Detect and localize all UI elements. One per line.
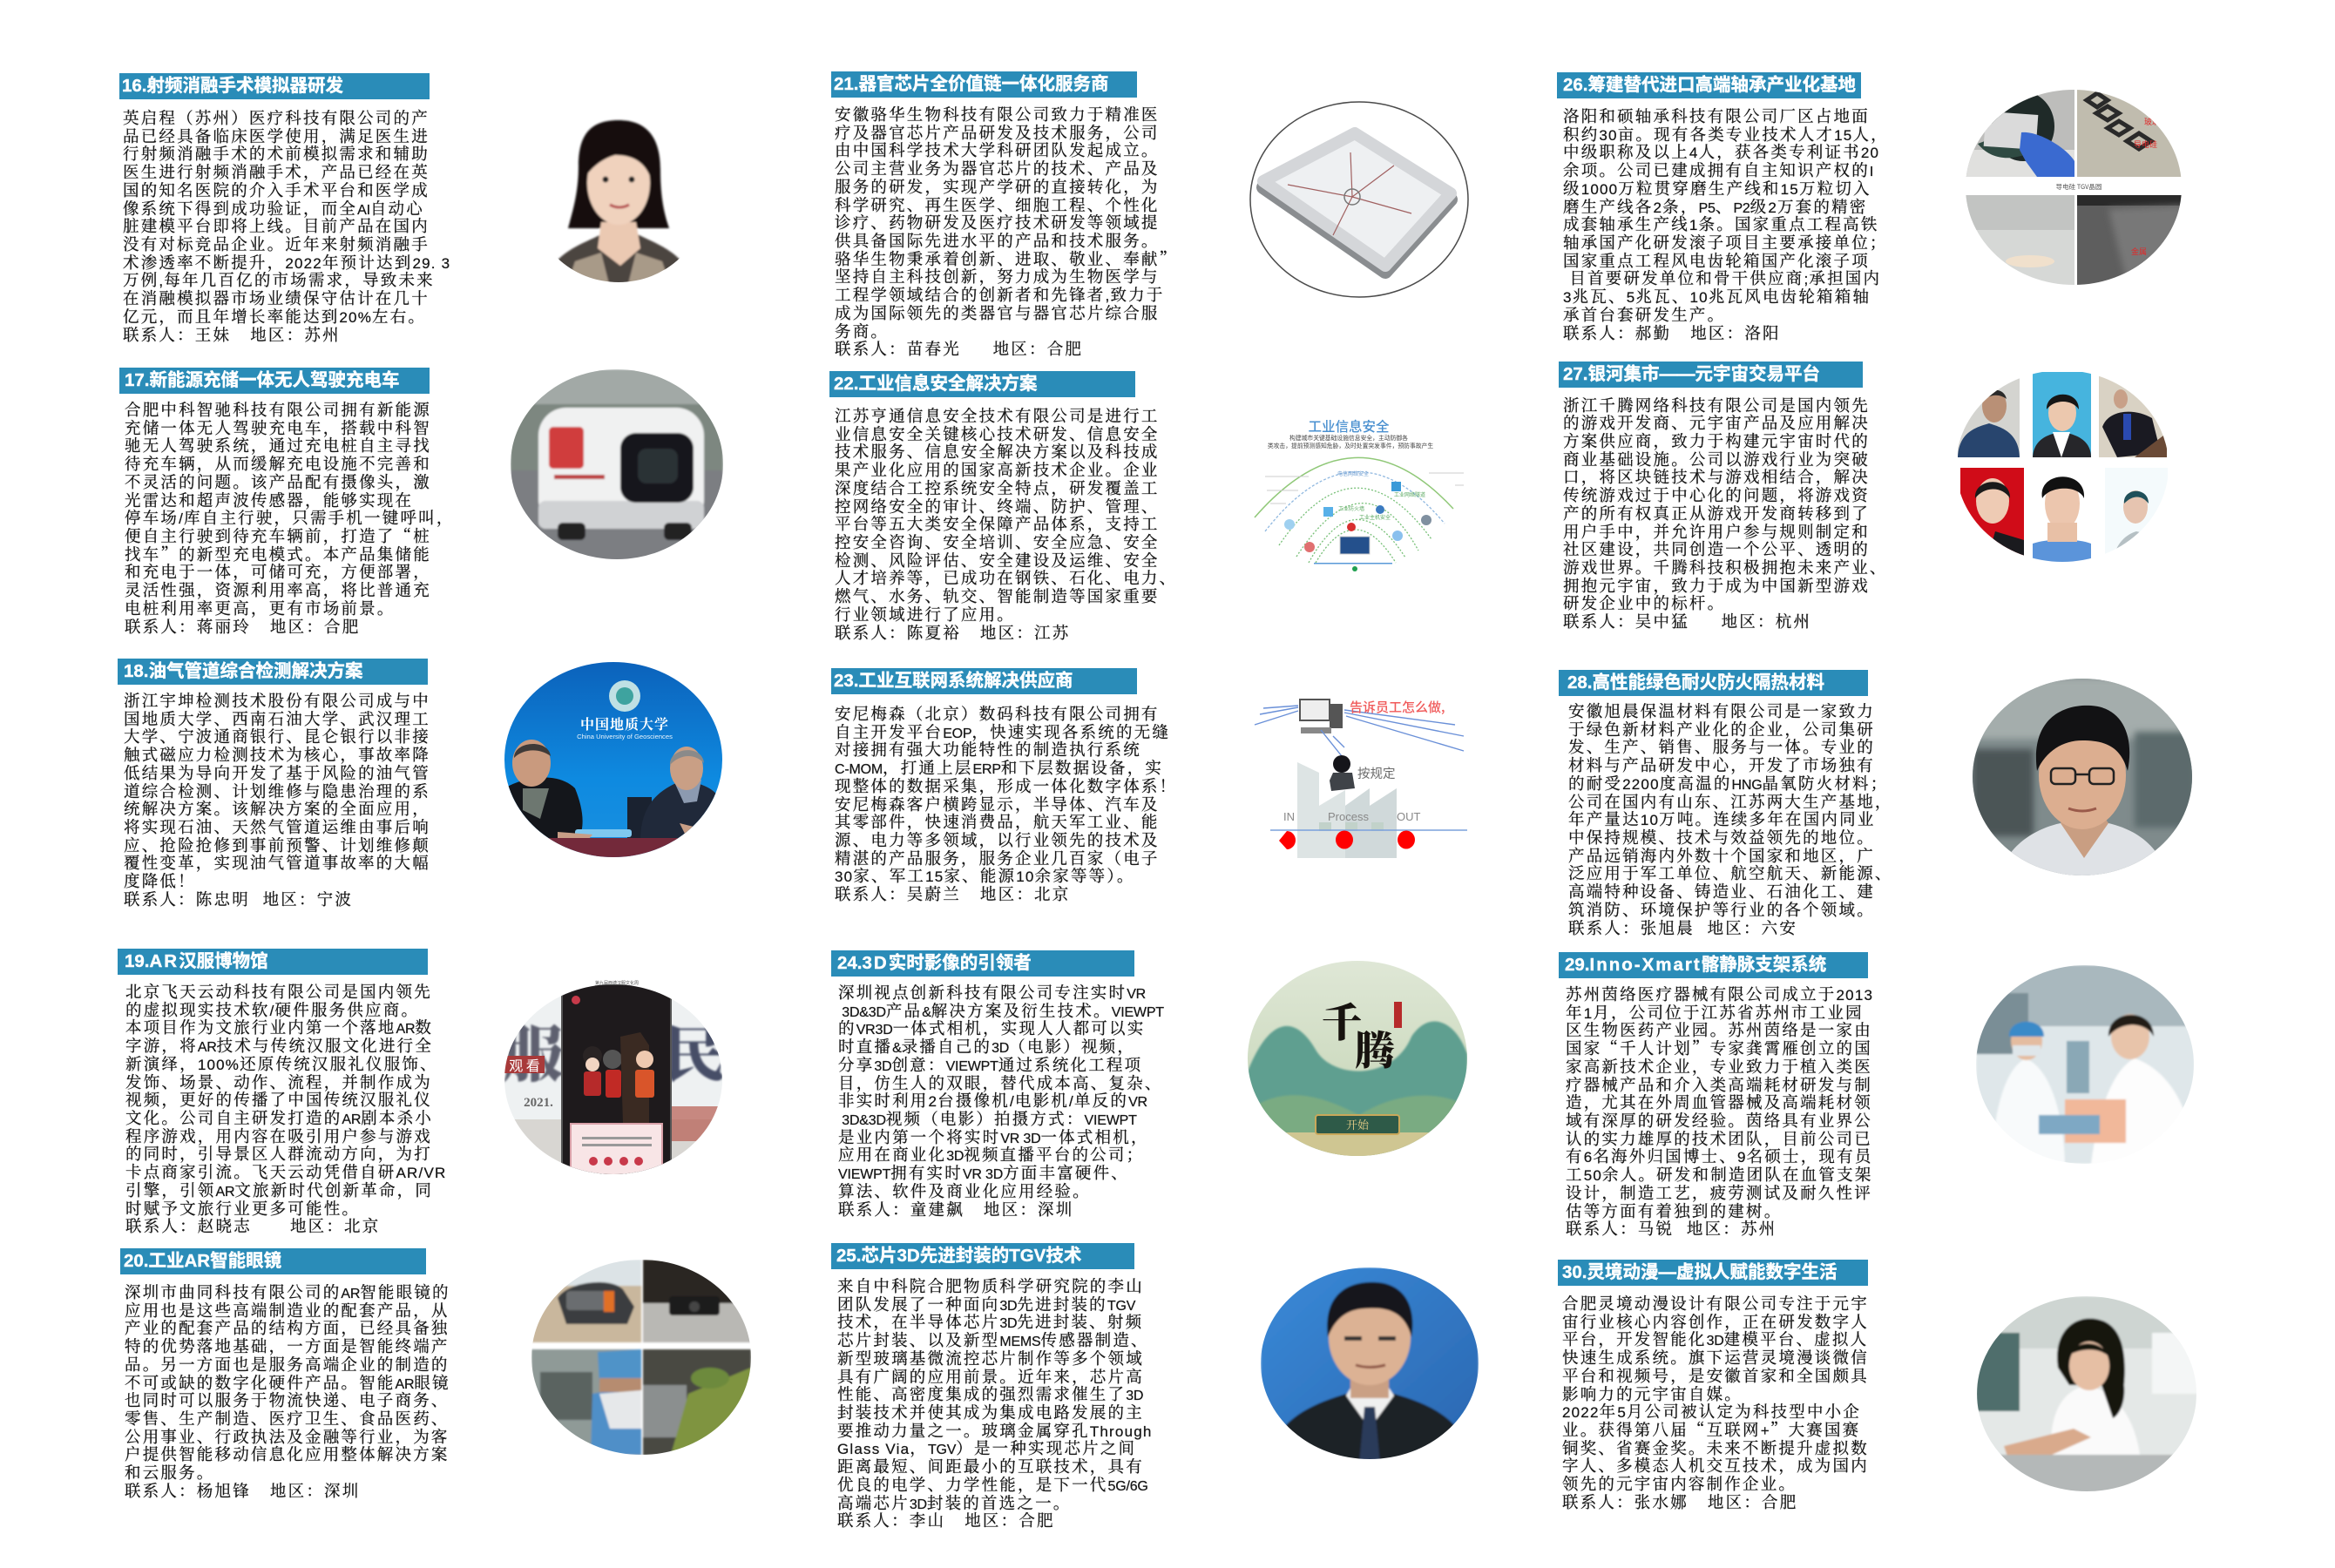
panel: 23 industrial internet system [831, 668, 1467, 903]
text block: 20 description: 深圳市曲同科技有限公司的AR智能眼镜的 应用也是这些高端制造业的配套产品，从 产业的配套产品的结构方面，已经具备独 特的优势落地基础，一方面是智能终端产 品。另一方面也是服务高端企业的制造的 不可或缺的数字化硬件产品。智能AR眼镜 也同时可以服务于物流快递、电子商务、 零售、生产制造、医疗卫生、食品医药、 公用事业、行政执法及金融等行业，为客 户提供智能移动信息化应用整体解决方案 和云服务。 联系人：杨旭锋 地区：深圳 [125, 1283, 450, 1500]
photo: Qianteng game title screen: 开始 [1346, 1116, 1370, 1132]
diagram: industrial security arcs: 构建城市关键基础设施信息安全，主动防御各 [1289, 433, 1408, 442]
photo: TGV wafer four-panel images [1966, 90, 2182, 285]
heading: 18: 18.油气管道综合检测解决方案 [124, 661, 362, 681]
photo: woman portrait [558, 118, 680, 282]
heading: 20 [120, 1248, 426, 1274]
photo: two men at China University of Geosciences: China University of Geosciences [577, 733, 673, 740]
panel: 16 radiofrequency ablation simulator [119, 73, 680, 344]
photo: Qianteng game title screen [1248, 961, 1467, 1156]
photo: charging robot vehicle [511, 369, 723, 559]
photo: six team member portraits [1958, 372, 2168, 562]
panel: 28 fireproof insulation material [1559, 670, 2192, 937]
diagram: industrial security arcs [1255, 418, 1464, 571]
heading: 24 [831, 950, 1134, 977]
text block: 26 description: 洛阳和硕轴承科技有限公司厂区占地面 积约30亩。现有各类专业技术人才15人， 中级职称及以上4人，获各类专利证书20 余项。公司已建成拥有自主知识产权的I 级1000万粒贯穿磨生产线和15万粒切入 磨生产线各2条，P5、P2级2万套的精密 成套轴承生产线1条。国家重点工程高铁 轴承国产化研发滚子项目主要承接单位； 国家重点工程风电齿轮箱国产化滚子项 目首要研发单位和骨干供应商;承担国内 3兆瓦、5兆瓦、10兆瓦风电齿轮箱箱轴 承首台套研发生产。 联系人：郝勤 地区：洛阳 [1563, 107, 1889, 342]
text block: 30 description: 合肥灵境动漫设计有限公司专注于元宇 宙行业核心内容创作，正在研发数字人 平台，开发智能化3D建模平台、虚拟人 快速生成系统。旗下运营灵境漫谈微信 平台和视频号，是安徽首家和全国颇具 影响力的元宇宙自媒。 2022年5月公司被认定为科技型中小企 业。获得第八届“互联网+”大赛国赛 铜奖、省赛金奖。未来不断提升虚拟数 字人、多模态人机交互技术，成为国内 领先的元宇宙内容制作企业。 联系人：张水娜 地区：合肥 [1562, 1294, 1869, 1511]
photo: woman working at desk [1976, 1296, 2197, 1492]
panel: 21 organ-on-chip services [831, 71, 1469, 358]
heading: 30 [1558, 1260, 1868, 1286]
heading: 17: 17.新能源充储一体无人驾驶充电车 [125, 370, 399, 390]
heading: 27 [1559, 362, 1863, 388]
heading: 24: 24.3D实时影像的引领者 [837, 953, 1032, 973]
text block: 25 description: 来自中科院合肥物质科学研究院的李山 团队发展了一种面向3D先进封装的TGV 技术，在半导体芯片3D先进封装、射频 芯片封装、以及新型MEMS传感器制造、 新型玻璃基微流控芯片制作等多个领域 具有广阔的应用前景。近年来，芯片高 性能、高密度集成的强烈需求催生了3D 封装技术并使其成为集成电路发展的主 要推动力量之一。玻璃金属穿孔Through Glass Via，TGV）是一种实现芯片之间 距离最短、间距最小的互联技术，具有 优良的电学、力学性能，是下一代5G/6G 高端芯片3D封装的首选之一。 联系人：李山 地区：合肥 [837, 1277, 1153, 1530]
text block: 27 description: 浙江千腾网络科技有限公司是国内领先 的游戏开发商、元宇宙产品及应用解决 方案供应商，致力于构建元宇宙时代的 商业基础设施。公司以游戏行业为突破 口，将区块链技术与游戏相结合，解决 传统游戏过于中心化的问题，将游戏资 产的所有权真正从游戏开发商转移到了 用户手中，并允许用户参与规则制定和 社区建设，共同创造一个公平、透明的 游戏世界。千腾科技积极拥抱未来产业、 拥抱元宇宙，致力于成为中国新型游戏 研发企业中的标杆。 联系人：吴中猛 地区：杭州 [1563, 395, 1888, 631]
text block: 21 description: 安徽骆华生物科技有限公司致力于精准医 疗及器官芯片产品研发及技术服务，公司 由中国科学技术大学科研团队发起成立。 公司主营业务为器官芯片的技术、产品及 服务的研发，实现产学研的直接转化，为 科学研究、再生医学、细胞工程、个性化 诊疗、药物研发及医疗技术研发等领域提 供具备国际先进水平的产品和技术服务。 骆华生物秉承着创新、进取、敬业、奉献” 坚持自主科技创新，努力成为生物医学与 工程学领域结合的创新者和先锋者,致力于 成为国际领先的类器官与器官芯片综合服 务商。 联系人：苗春光 地区：合肥 [835, 105, 1177, 358]
photo: four-panel AR glasses images [531, 1260, 751, 1455]
panel: 27 galaxy market metaverse [1559, 362, 2168, 631]
panel: 17 unmanned charging vehicle [119, 368, 723, 636]
heading: 20: 20.工业AR智能眼镜 [124, 1251, 281, 1271]
heading: 28: 28.高性能绿色耐火防火隔热材料 [1567, 672, 1824, 693]
photo: two men at China University of Geosciences [504, 662, 722, 857]
text block: 17 description: 合肥中科智驰科技有限公司拥有新能源 充储一体无人驾驶充电车，搭载中科智 驰无人驾驶系统，通过充电桩自主寻找 待充车辆，从而缓解充电设施不完善和 不灵活的问题。该产品配有摄像头，激 光雷达和超声波传感器，能够实现在 停车场/库自主行驶，只需手机一键呼叫， 便自主行驶到待充车辆前，打造了“桩 找车”的新型充电模式。本产品集储能 和充电于一体，可储可充，方便部署， 灵活性强，资源利用率高，将比普通充 电桩利用率更高，更有市场前景。 联系人：蒋丽玲 地区：合肥 [125, 401, 455, 636]
heading: 25: 25.芯片3D先进封装的TGV技术 [836, 1246, 1081, 1266]
photo: AR Hanfu phone screen: 2021. [524, 1096, 553, 1110]
photo: man in suit portrait [1261, 1267, 1479, 1459]
photo: AR Hanfu phone screen [504, 980, 722, 1174]
panel: 25 TGV advanced chip packaging [831, 1243, 1479, 1530]
diagram: factory process flow: 告诉员工怎么做, [1350, 698, 1445, 716]
text block: 19 description: 北京飞天云动科技有限公司是国内领先 的虚拟现实技术软/硬件服务供应商。 本项目作为文旅行业内第一个落地AR数 字游，将AR技术与传统汉服文化进行全 新演绎，100%还原传统汉服礼仪服饰、 发饰、场景、动作、流程，并制作成为 视频，更好的传播了中国传统汉服礼仪 文化。公司自主研发打造的AR剧本杀小 程序游戏，用内容在吸引用户参与游戏 的同时，引导景区人群流动方向，为打 卡点商家引流。飞天云动凭借自研AR/VR 引擎，引领AR文旅新时代创新革命，同 时赋予文旅行业更多可能性。 联系人：赵晓志 地区：北京 [125, 983, 446, 1235]
heading: 28 [1559, 670, 1868, 696]
heading: 29: 29.Inno-Xmart髂静脉支架系统 [1565, 955, 1826, 975]
heading: 16 [119, 73, 430, 99]
text block: 28 description: 安徽旭晨保温材料有限公司是一家致力 于绿色新材料产业化的企业，公司集研 发、生产、销售、服务与一体。专业的 材料与产品研发中心，开发了市场独有 的耐受2200度高温的HNG晶氧防火材料； 公司在国内有山东、江苏两大生产基地， 年产量达10万吨。连续多年在国内同业 中保持规模、技术与效益领先的地位。 产品远销海内外数十个国家和地区，广 泛应用于军工单位、航空航天、新能源、 高端特种设备、铸造业、石油化工、建 筑消防、环境保护等行业的各个领域。 联系人：张旭晨 地区：六安 [1568, 702, 1893, 937]
diagram: industrial security arcs: 电信网络安全 [1337, 470, 1369, 477]
diagram: factory process flow: OUT [1397, 810, 1420, 823]
caption between photos: 导电硅 TGV晶圆 [2056, 182, 2102, 192]
panel: 19 AR Hanfu museum [118, 949, 722, 1235]
heading: 21 [831, 71, 1137, 98]
panel: 26 high-end bearing base [1557, 72, 2182, 342]
diagram: industrial security arcs: 类攻击，提前预测感知危胁，及时处置突发事件，预防事故产生 [1268, 441, 1433, 449]
photo: lab workers in white coats [1976, 965, 2195, 1164]
text block: 22 description: 江苏亨通信息安全技术有限公司是进行工 业信息安全关键核心技术研发、信息安全 技术服务、信息安全解决方案以及科技成 果产业化应用的国家高新技术企业。企业 深度结合工控系统安全特点，研发覆盖工 控网络安全的审计、终端、防护、管理、 平台等五大类安全保障产品体系，支持工 控安全咨询、安全培训、安全应急、安全 检测、风险评估、安全建设及运维、安全 人才培养等，已成功在钢铁、石化、电力、 燃气、水务、轨交、智能制造等国家重要 行业领域进行了应用。 联系人：陈夏裕 地区：江苏 [835, 407, 1177, 642]
diagram: industrial security arcs: 工业防火墙 [1338, 504, 1364, 512]
photo: AR Hanfu phone screen: 观 看 [509, 1054, 540, 1075]
photo: Qianteng game title screen: 千 [1322, 991, 1362, 1049]
diagram: industrial security arcs: 工业网络隧道 [1394, 490, 1425, 498]
diagram: factory process flow [1255, 698, 1467, 858]
heading: 26: 26.筹建替代进口高端轴承产业化基地 [1563, 75, 1856, 95]
heading: 30: 30.灵境动漫—虚拟人赋能数字生活 [1562, 1262, 1837, 1282]
heading: 18 [118, 659, 428, 685]
photo: TGV wafer four-panel images: 金属 [2131, 246, 2147, 257]
panel: 24 real-time 3D imaging [831, 950, 1467, 1219]
heading: 21: 21.器官芯片全价值链一体化服务商 [834, 74, 1108, 94]
diagram: factory process flow: IN [1283, 810, 1295, 823]
diagram: factory process flow: Process [1328, 810, 1369, 823]
panel: 20 industrial AR smart glasses [120, 1248, 751, 1500]
heading: 23 [831, 668, 1137, 694]
panel: 22 industrial information security [829, 371, 1464, 642]
panel: 29 Inno-Xmart iliac vein stent [1559, 952, 2194, 1238]
text block: 29 description: 苏州茵络医疗器械有限公司成立于2013 年1月，公司位于江苏省苏州市工业园 区生物医药产业园。苏州茵络是一家由 国家“千人计划”专家龚霄雁创立的国 家高新技术企业，专业致力于植入类医 疗器械产品和介入类高端耗材研发与制 造，尤其在外周血管器械及高端耗材领 域有深厚的研发经验。茵络具有业界公 认的实力雄厚的技术团队，目前公司已 有6名海外归国博士、9名硕士，现有员 工50余人。研发和制造团队在血管支架 设计，制造工艺，疲劳测试及耐久性评 估等方面有着独到的建树。 联系人：马锐 地区：苏州 [1566, 985, 1873, 1238]
caption over phone: 第九届西塘汉服文化周 [595, 980, 639, 986]
heading: 16: 16.射频消融手术模拟器研发 [122, 76, 343, 96]
heading: 29 [1559, 952, 1868, 978]
text block: 16 description: 英启程（苏州）医疗科技有限公司的产 品已经具备临床医学使用，满足医生进 行射频消融手术的术前模拟需求和辅助 医生进行射频消融手术，产品已经在英 国的知名医院的介入手术平台和医学成 像系统下得到成功验证，而全AI自动心 脏建模平台即将上线。目前产品在国内 没有对标竞品企业。近年来射频消融手 术渗透率不断提升，2022年预计达到29. 3 万例,每年几百亿的市场需求，导致未来 在消融模拟器市场业绩保守估计在几十 亿元，而且年增长率能达到20%左右。 联系人：王妹 地区：苏州 [123, 109, 450, 344]
text block: 18 description: 浙江宇坤检测技术股份有限公司成与中 国地质大学、西南石油大学、武汉理工 大学、宁波通商银行、昆仑银行以非接 触式磁应力检测技术为核心，事故率降 低结果为导向开发了基于风险的油气管 道综合检测、计划维修与隐患治理的系 统解决方案。该解决方案的全面应用， 将实现石油、天然气管道运维由事后响 应、抢险抢修到事前预警、计划维修颠 覆性变革，实现油气管道事故率的大幅 度降低！ 联系人：陈忠明 地区：宁波 [124, 692, 430, 909]
heading: 17 [119, 368, 430, 394]
photo: TGV wafer four-panel images: 玻璃 [2144, 116, 2160, 127]
heading: 22 [829, 371, 1135, 397]
heading: 19 [118, 949, 428, 975]
heading: 19: 19.AR汉服博物馆 [125, 951, 268, 971]
photo: young man with glasses [1973, 679, 2192, 875]
text block: 24 description: 深圳视点创新科技有限公司专注实时VR 3D&3D产品&解决方案及衍生技术。VIEWPT 的VR3D一体式相机，实现人人都可以实 时直播&录播自己的3D（电影）视频， 分享3D创意：VIEWPT通过系统化工程项 目，仿生人的双眼，替代成本高、复杂、 非实时利用2台摄像机/电影机/单反的VR 3D&3D视频（电影）拍摄方式：VIEWPT 是业内第一个将实时VR 3D一体式相机， 应用在商业化3D视频直播平台的公司； VIEWPT拥有实时VR 3D方面丰富硬件、 算法、软件及商业化应用经验。 联系人：童建飙 地区：深圳 [838, 983, 1164, 1219]
heading: 25 [831, 1243, 1134, 1269]
text block: 23 description: 安尼梅森（北京）数码科技有限公司拥有 自主开发平台EOP，快速实现各系统的无缝 对接拥有强大功能特性的制造执行系统 C-MOM，打通上层ERP和下层数据设备，实 现整体的数据采集，形成一体化数字体系！ 安尼梅森客户横跨显示，半导体、汽车及 其零部件，快速消费品，航天军工业、能 源、电力等多领域，以行业领先的技术及 精湛的产品服务，服务企业几百家（电子 30家、军工15家、能源10余家等等）。 联系人：吴蔚兰 地区：北京 [835, 705, 1177, 903]
photo: AR Hanfu phone screen: 服 [504, 1006, 564, 1094]
heading: 27: 27.银河集市——元宇宙交易平台 [1563, 364, 1820, 384]
diagram: industrial security arcs: 工业主机安全 [1359, 513, 1391, 521]
diagram: factory process flow: 按规定 [1357, 764, 1396, 782]
photo: TGV wafer four-panel images: 导电硅 [2134, 139, 2157, 150]
photo: Qianteng game title screen: 腾 [1355, 1019, 1395, 1077]
panel: 18 oil and gas pipeline inspection [118, 659, 722, 909]
photo: two men at China University of Geosciences: 中国地质大学 [580, 713, 669, 733]
heading: 22: 22.工业信息安全解决方案 [834, 374, 1037, 394]
panel: 30 Lingjing animation digital humans [1558, 1260, 2197, 1511]
heading: 23: 23.工业互联网系统解决供应商 [834, 671, 1073, 691]
photo: organ chip device [1249, 101, 1469, 298]
